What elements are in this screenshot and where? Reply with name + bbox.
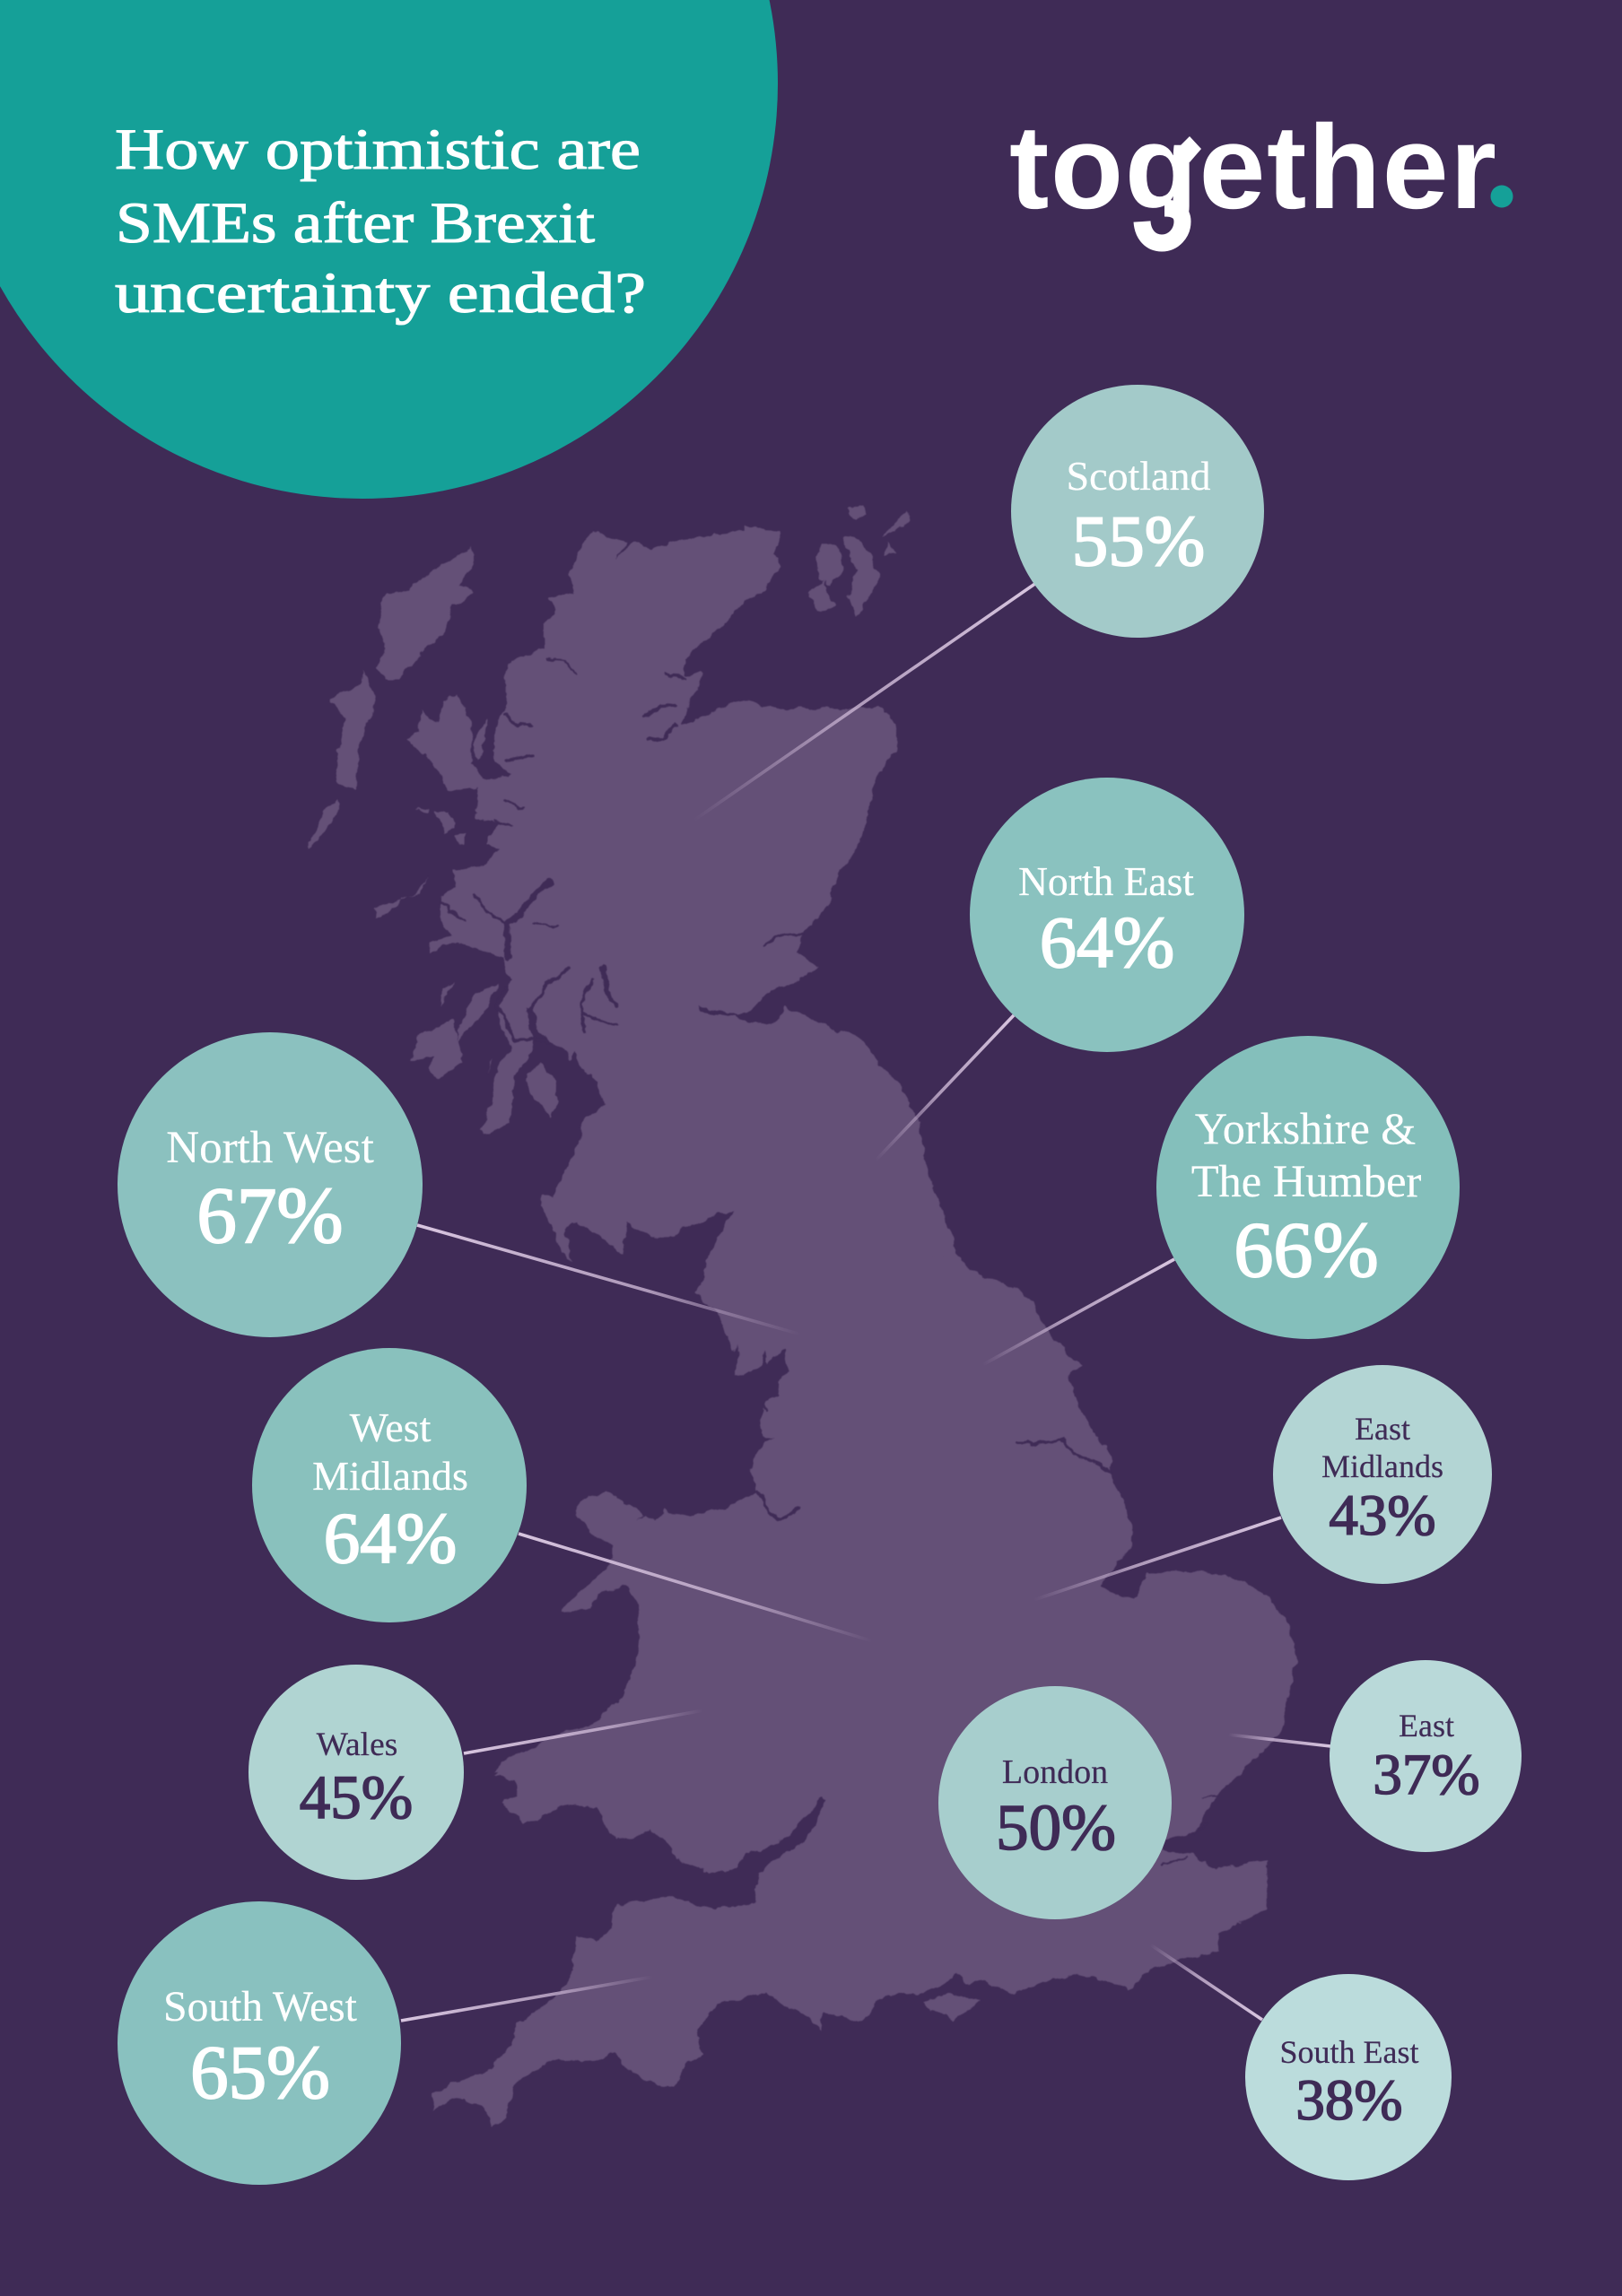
bubble: North East 64%: North East xyxy=(1018,858,1194,904)
line: Scotland xyxy=(693,583,1036,821)
bubble: South West 65%: South West xyxy=(163,1984,357,2031)
line: South East xyxy=(1150,1944,1262,2020)
title: SMEs after Brexit xyxy=(116,191,595,256)
bubble: North East 64%: 64% xyxy=(1040,901,1174,983)
bubble: Yorkshire & The Humber 66%: 66% xyxy=(1234,1207,1379,1294)
bubble: East Midlands 43% xyxy=(1273,1365,1492,1584)
bubble: South West 65%: 65% xyxy=(190,2031,330,2115)
bubble: Yorkshire & The Humber 66%: Yorkshire & xyxy=(1195,1103,1416,1153)
bubble: West Midlands 64%: 64% xyxy=(324,1498,457,1578)
bubble: East Midlands 43%: East xyxy=(1355,1411,1410,1447)
northern England and north Wales xyxy=(493,1121,1064,1793)
bubble: South East 38%: 38% xyxy=(1295,2068,1403,2133)
bubble: East 37%: East xyxy=(1399,1708,1454,1744)
bubble: West Midlands 64%: West xyxy=(350,1405,432,1450)
line: East xyxy=(1228,1735,1330,1746)
bubble: North West 67%: 67% xyxy=(196,1172,344,1260)
bubble: London 50%: 50% xyxy=(996,1791,1116,1864)
bubble: West Midlands 64% xyxy=(252,1348,527,1622)
bubble: East Midlands 43%: 43% xyxy=(1329,1483,1436,1548)
bubble: Yorkshire & The Humber 66%: The Humber xyxy=(1191,1156,1421,1206)
UK map xyxy=(309,503,1296,2127)
bubble: Scotland 55%: 55% xyxy=(1072,500,1205,581)
bubble: North West 67%: North West xyxy=(166,1123,374,1173)
bubble: West Midlands 64%: Midlands xyxy=(312,1453,468,1499)
bubble: Wales 45%: Wales xyxy=(317,1726,397,1763)
bubble: East Midlands 43%: Midlands xyxy=(1321,1448,1443,1484)
title xyxy=(115,117,646,326)
bubble: London 50% xyxy=(938,1686,1172,1919)
bubble: East 37% xyxy=(1330,1660,1522,1852)
connector lines xyxy=(401,583,1330,2021)
line: North East xyxy=(876,1015,1014,1161)
bubble: Wales 45%: 45% xyxy=(300,1763,413,1831)
line: East Midlands xyxy=(1033,1518,1281,1600)
line: Yorkshire xyxy=(982,1259,1174,1365)
title: uncertainty ended? xyxy=(115,261,646,326)
bubble: Scotland 55% xyxy=(1011,385,1264,638)
bubble: South East 38% xyxy=(1245,1974,1452,2180)
Scotland mainland and islands xyxy=(309,503,921,1148)
bubble: Scotland 55%: Scotland xyxy=(1067,453,1210,499)
teal title circle xyxy=(0,0,778,499)
bubble: East 37%: 37% xyxy=(1373,1743,1480,1807)
bubble: London 50%: London xyxy=(1002,1753,1108,1791)
title: How optimistic are xyxy=(115,117,641,182)
bubble: South East 38%: South East xyxy=(1279,2034,1419,2070)
bubble: Wales 45% xyxy=(249,1665,464,1880)
line: West Midlands xyxy=(519,1534,873,1641)
bubble: Yorkshire & The Humber 66% xyxy=(1156,1036,1460,1339)
bubble: South West 65% xyxy=(118,1901,401,2185)
logo: together: together xyxy=(1009,101,1496,234)
bubble: North West 67% xyxy=(118,1032,423,1337)
east coast, Yorkshire, Lincolnshire and East Anglia xyxy=(933,1256,1296,1704)
line: Wales xyxy=(464,1710,703,1753)
line: South West xyxy=(401,1977,653,2021)
line: North West xyxy=(417,1225,801,1335)
bubble: North East 64% xyxy=(970,778,1244,1052)
southern Wales and southern England xyxy=(433,1565,1296,2127)
